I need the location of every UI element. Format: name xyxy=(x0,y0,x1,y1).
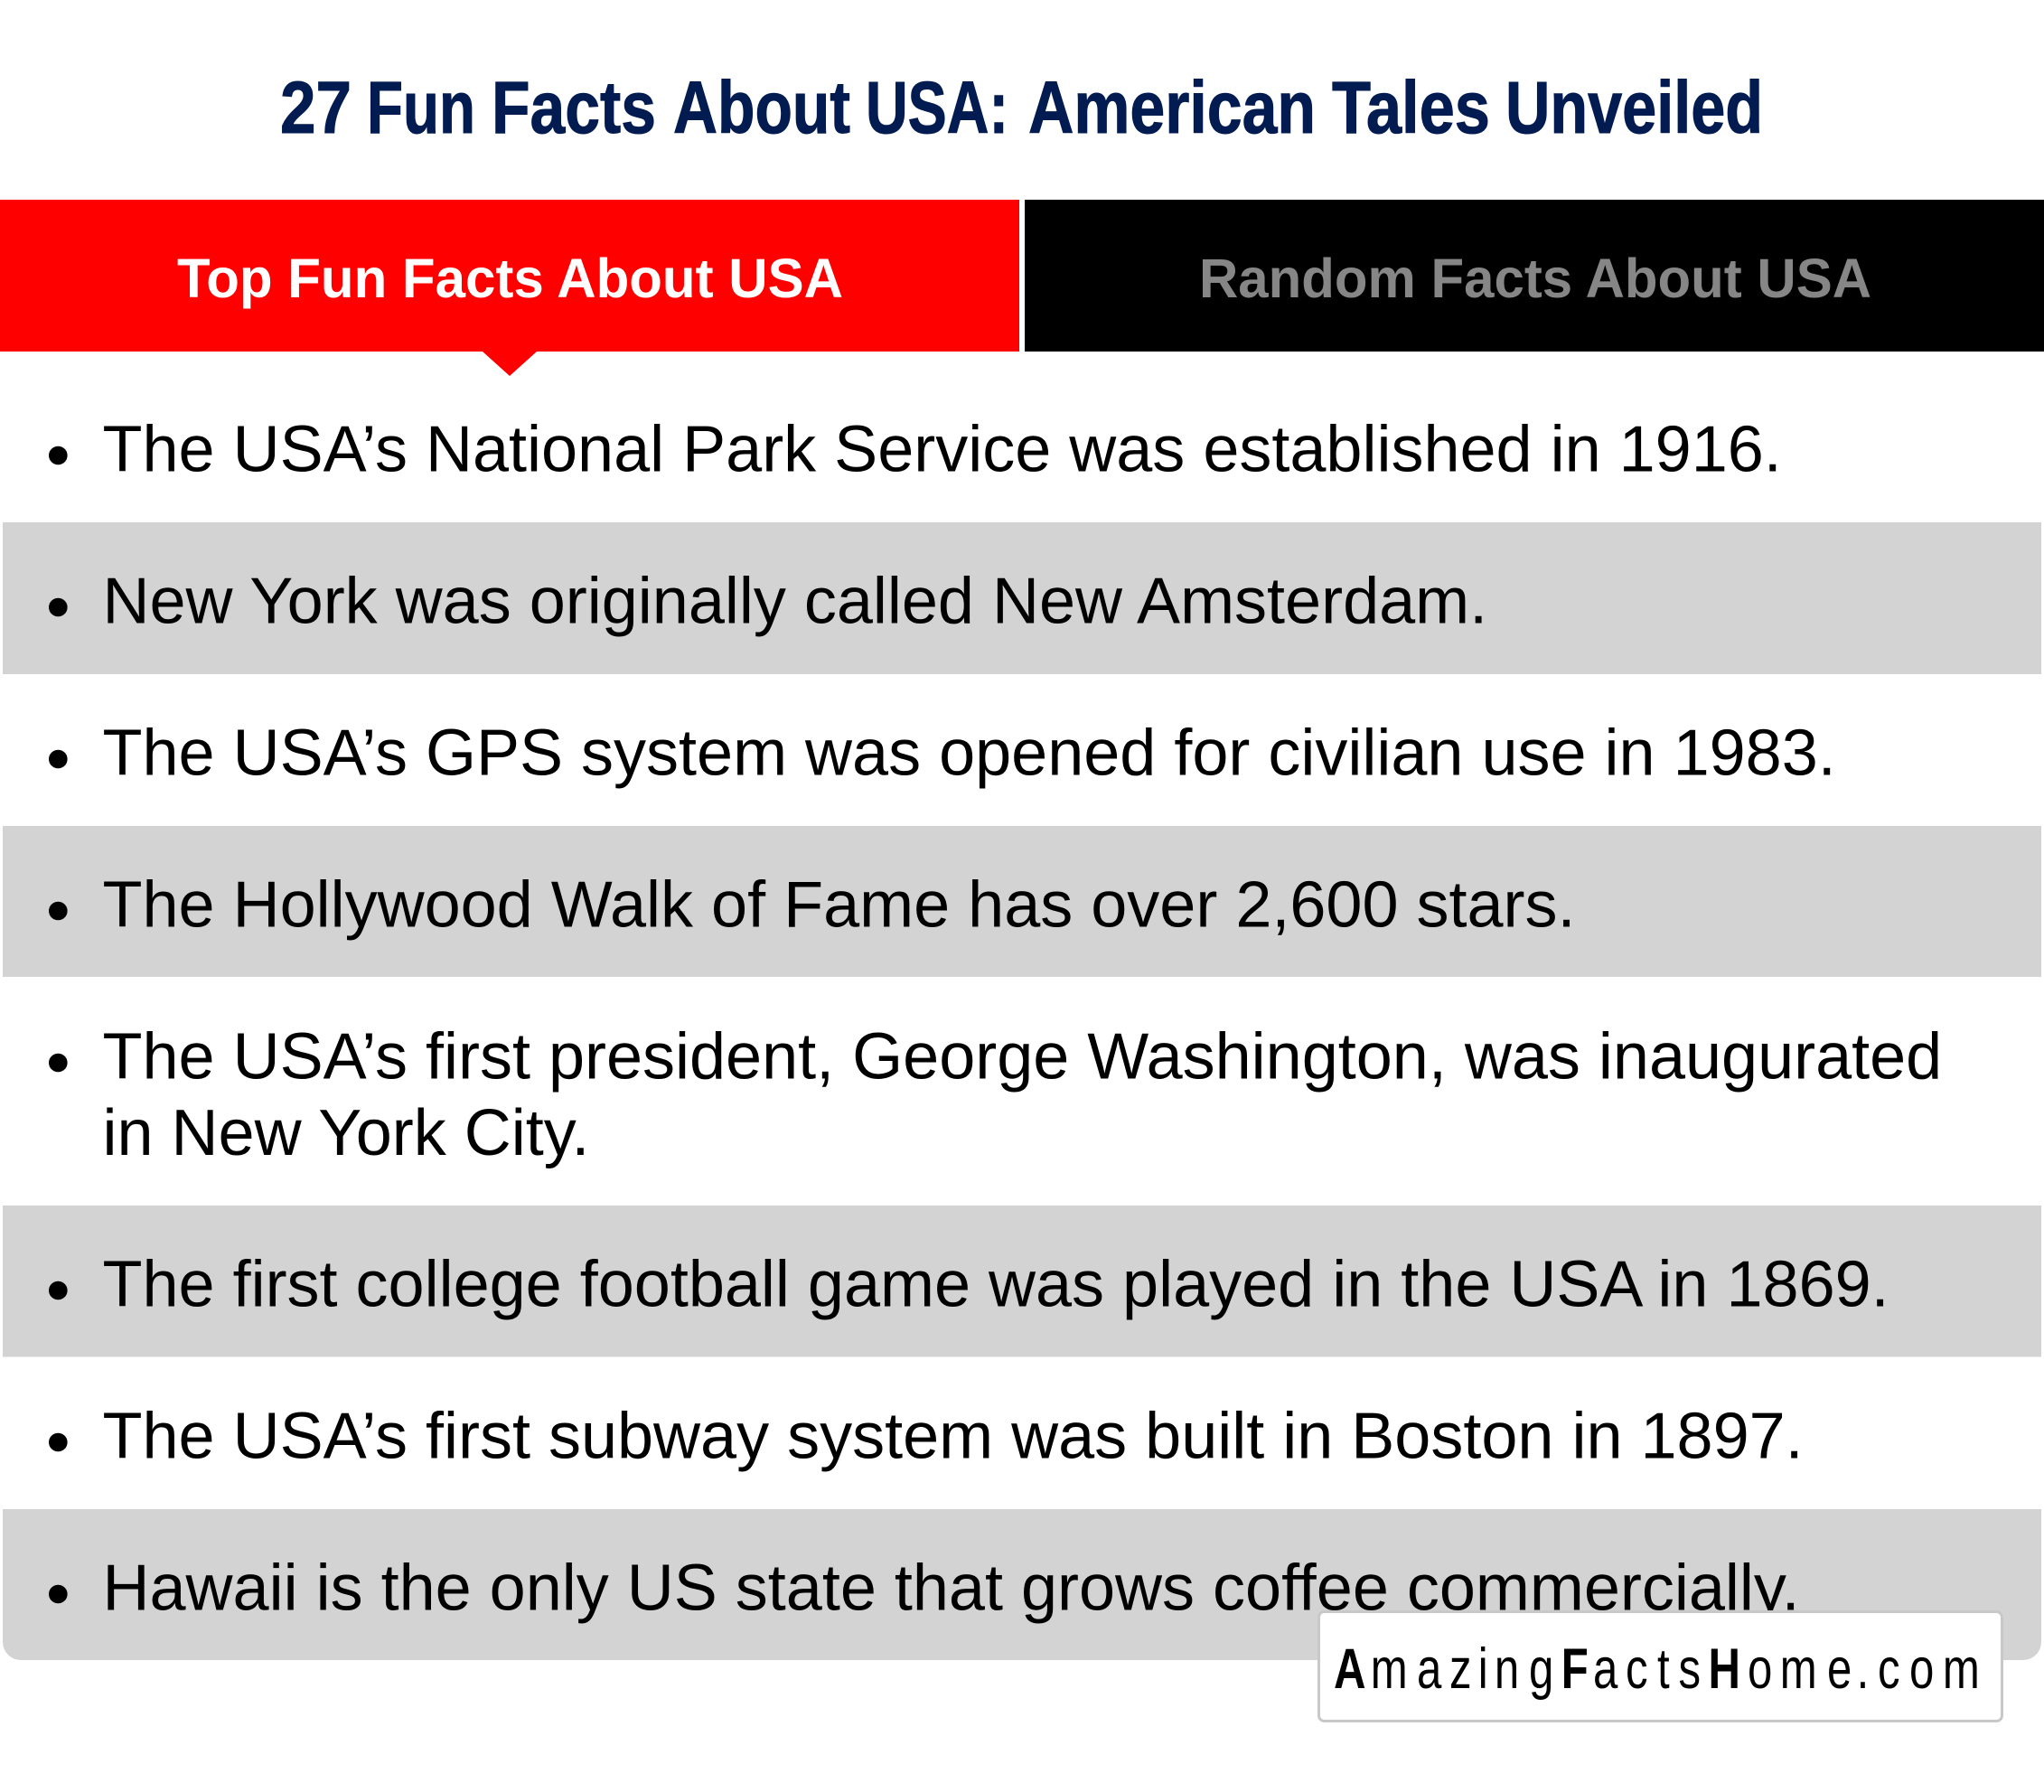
active tab pointer xyxy=(483,352,537,376)
title: Fun xyxy=(367,67,475,149)
title: About xyxy=(673,67,850,149)
title: Tales xyxy=(1332,67,1490,149)
watermark text: ome.com xyxy=(1748,1637,1980,1700)
title xyxy=(280,67,1763,149)
fact 2 xyxy=(3,522,2041,674)
fact 5: in New York City. xyxy=(103,1097,589,1169)
fact list xyxy=(3,414,2041,1660)
fact 7: The USA’s first subway system was built in Boston in 1897. xyxy=(103,1401,1804,1473)
title: USA: xyxy=(866,67,1008,149)
title: American xyxy=(1028,67,1316,149)
fact 4 xyxy=(3,826,2041,977)
title: Facts xyxy=(492,67,656,149)
fact 8: Hawaii is the only US state that grows coffee commercially. xyxy=(103,1553,1800,1625)
fact 2: New York was originally called New Amsterdam. xyxy=(103,566,1487,638)
fact 5 xyxy=(49,1021,1942,1169)
tab: top fun facts (active) xyxy=(0,200,1019,376)
watermark text: H xyxy=(1709,1637,1740,1700)
watermark badge xyxy=(1319,1612,2002,1721)
active tab label: Top Fun Facts About USA xyxy=(177,248,843,309)
watermark text: mazing xyxy=(1371,1637,1553,1700)
title: Unveiled xyxy=(1505,67,1763,149)
fact 5: The USA’s first president, George Washington, was inaugurated xyxy=(103,1021,1942,1093)
tab: random facts (inactive) xyxy=(1025,200,2044,352)
fact 6 xyxy=(3,1206,2041,1357)
watermark text: F xyxy=(1561,1637,1589,1700)
fact 1: The USA’s National Park Service was established in 1916. xyxy=(103,414,1782,486)
watermark text: A xyxy=(1334,1637,1365,1700)
watermark text: acts xyxy=(1593,1637,1701,1700)
title: 27 xyxy=(280,67,352,149)
inactive tab label: Random Facts About USA xyxy=(1199,248,1871,309)
fact 6: The first college football game was played in the USA in 1869. xyxy=(103,1249,1889,1321)
fact 3: The USA’s GPS system was opened for civilian use in 1983. xyxy=(103,718,1836,790)
fact 8 xyxy=(3,1509,2041,1660)
fact 4: The Hollywood Walk of Fame has over 2,600 stars. xyxy=(103,869,1576,942)
